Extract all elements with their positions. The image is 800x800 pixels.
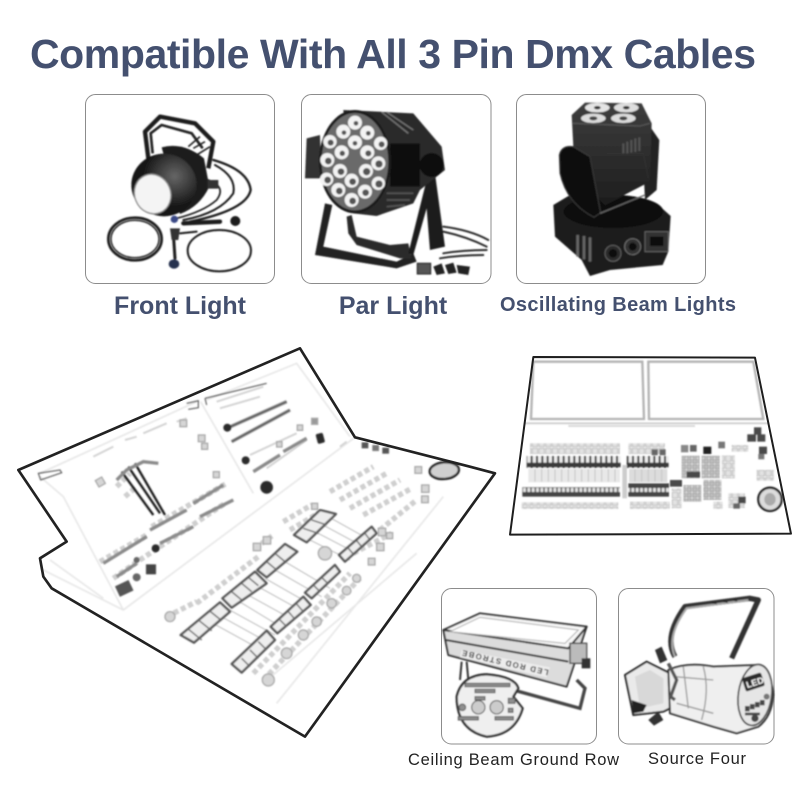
icon: par light fixture — [305, 110, 488, 275]
panel: front light — [86, 94, 274, 284]
panel: oscillating beam lights — [516, 94, 706, 284]
icon: source four fixture: LED — [745, 675, 766, 690]
control rows — [522, 427, 782, 511]
console outline — [18, 348, 495, 737]
icon: moving head fixture — [553, 103, 671, 276]
icon: source four fixture — [625, 598, 776, 733]
illustration: large angled lighting console — [18, 348, 495, 737]
title: Compatible With All 3 Pin Dmx Cables — [30, 31, 756, 77]
label: source four: Source Four — [648, 750, 746, 768]
screens — [525, 362, 768, 426]
icon: strobe bar fixture: LED ROD STROBE — [461, 648, 549, 677]
panel: source four — [618, 588, 776, 744]
label: front light: Front Light — [114, 292, 247, 320]
flat console outline — [510, 357, 791, 535]
label: par light: Par Light — [339, 292, 448, 320]
illustration: flat lighting console — [510, 357, 791, 535]
label: oscillating beam lights: Oscillating Beam Lights — [500, 294, 736, 316]
panel: ceiling beam ground row — [442, 588, 596, 744]
label: ceiling beam ground row: Ceiling Beam Ground Row — [408, 751, 619, 769]
icon: front light fixture — [108, 117, 251, 271]
console soft detail — [40, 363, 443, 703]
icon: strobe bar fixture — [443, 613, 590, 737]
console dark controls — [38, 383, 460, 673]
panel: par light — [302, 94, 491, 284]
